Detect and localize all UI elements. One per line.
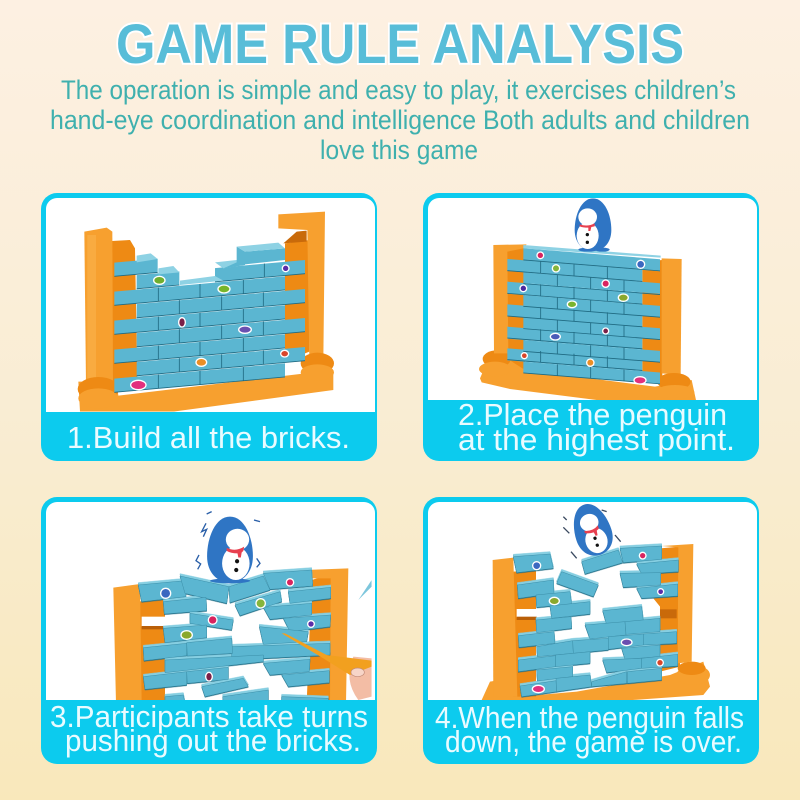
title: GAME RULE ANALYSIS (116, 12, 684, 75)
stickers (532, 552, 664, 693)
penguin (207, 517, 253, 583)
caption: step 3: pushing out the bricks. (65, 723, 361, 758)
intro text: love this game (320, 135, 478, 165)
bricks (114, 246, 305, 392)
caption: step 4: down, the game is over. (445, 724, 742, 759)
bricks (513, 546, 678, 697)
caption: step 2: at the highest point. (458, 422, 735, 457)
bricks (507, 247, 660, 384)
shake marks (563, 510, 621, 558)
illustration: penguin falling (482, 499, 710, 701)
tweezers and hand (282, 580, 372, 700)
intro text: The operation is simple and easy to play, it exercises children’s (61, 75, 736, 105)
stickers (131, 265, 289, 390)
caption: step 3: 3.Participants take turns (50, 699, 368, 734)
caption: step 2 (458, 397, 735, 457)
penguin (574, 504, 613, 556)
caption: step 3 (50, 699, 368, 758)
caption: step 4 (435, 700, 744, 759)
panel: step 4 (423, 497, 759, 764)
caption: step 1: 1.Build all the bricks. (67, 420, 350, 455)
top faces (137, 243, 285, 285)
stickers (161, 579, 314, 681)
illustration: complete wall (78, 212, 334, 412)
panel: step 1 (41, 193, 377, 461)
caption: step 4: 4.When the penguin falls (435, 700, 744, 735)
illustration: wall with penguin on top (479, 198, 696, 400)
panel: step 2 (423, 193, 759, 461)
panel: step 3 (41, 497, 377, 764)
caption: step 2: 2.Place the penguin (458, 397, 727, 432)
illustration: pushing out bricks (113, 512, 372, 703)
bricks (138, 570, 331, 703)
intro text (50, 75, 750, 165)
penguin (575, 198, 611, 252)
stickers (520, 252, 646, 384)
intro text: hand-eye coordination and intelligence Both adults and children (50, 105, 750, 135)
shake marks (196, 512, 260, 569)
